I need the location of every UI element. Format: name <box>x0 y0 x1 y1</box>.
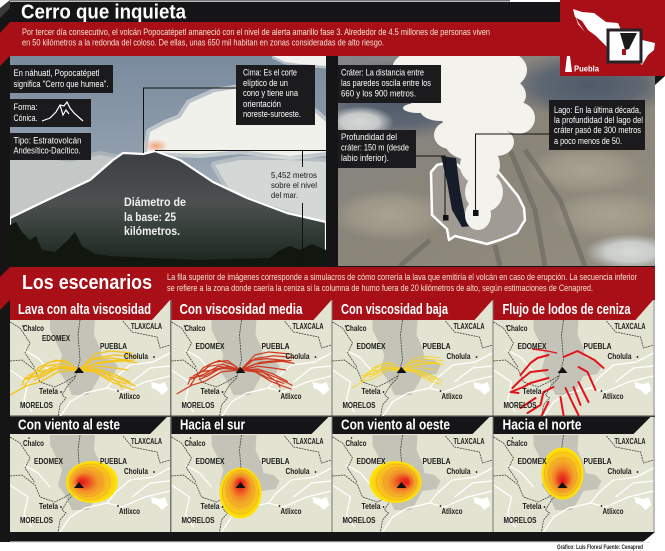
callout: lake: la profundidad del lago del <box>554 115 643 125</box>
label: height: 5,452 metros <box>271 170 317 180</box>
text box: forma with cone icon: Forma: <box>14 102 38 112</box>
map: Chalco <box>346 324 367 333</box>
map: Atlixco <box>119 392 140 401</box>
photo: terrain <box>338 56 655 266</box>
map <box>332 435 492 532</box>
band: Los escenarios <box>10 267 655 300</box>
map: Tetela <box>522 387 542 396</box>
panel backgrounds <box>10 300 655 532</box>
map: PUEBLA <box>584 457 612 466</box>
header: Hacia el sur <box>180 416 245 434</box>
photo: smoke plume <box>393 44 535 230</box>
map: MORELOS <box>182 516 215 525</box>
text box: tipo: Tipo: Estratovolcán <box>14 136 82 146</box>
map: Atlixco <box>280 507 302 516</box>
map: Atlixco <box>280 392 302 401</box>
leader: height <box>155 150 326 266</box>
map: MORELOS <box>342 516 376 525</box>
header <box>494 416 650 434</box>
intro band <box>10 22 560 56</box>
map: Atlixco <box>442 507 463 516</box>
callout: cima: elíptico de un <box>243 78 288 88</box>
photo: volcano cone with white outline <box>10 151 326 266</box>
map: Atlixco <box>119 507 140 516</box>
label: height <box>271 170 317 200</box>
panel: locator map <box>560 0 665 85</box>
map: PUEBLA <box>262 342 290 351</box>
panel: crater photo <box>338 56 655 266</box>
map: Cholula <box>608 467 632 476</box>
map <box>172 320 332 417</box>
callout: crater: 660 y los 900 metros. <box>341 88 416 98</box>
left fold accent: top <box>0 22 10 66</box>
label: base diameter: la base: 25 <box>124 212 177 224</box>
map: TLAXCALA <box>454 322 485 331</box>
panel: hacia el norte <box>494 416 654 532</box>
title: Cerro que inquieta <box>21 2 187 24</box>
map: TLAXCALA <box>292 322 324 331</box>
label: base diameter <box>124 197 186 238</box>
map: Atlixco <box>442 392 463 401</box>
heading: Los escenarios: Los escenarios <box>22 272 152 294</box>
header: Con viento al este <box>18 416 120 434</box>
map: Chalco <box>506 324 528 333</box>
map: Tetela <box>362 387 381 396</box>
icon: Mexico silhouette <box>573 9 655 65</box>
map: Cholula <box>124 352 148 361</box>
callout: crater: Cráter: La distancia entre <box>341 68 424 78</box>
map: EDOMEX <box>42 334 71 343</box>
panel: lava alta viscosidad <box>10 300 170 417</box>
map: Cholula <box>286 352 310 361</box>
map: Tetela <box>522 502 542 511</box>
map: Tetela <box>39 387 58 396</box>
panel: flujo de lodos <box>494 300 654 417</box>
map: TLAXCALA <box>292 437 324 446</box>
intro band: en 50 kilómetros a la redonda del coloso. De ellas, unas 650 mil habitan en zonas consideradas de alto riesgo. <box>22 38 384 48</box>
map: MORELOS <box>20 516 54 525</box>
photo: sky and clouds <box>10 56 326 221</box>
map: MORELOS <box>504 516 537 525</box>
icon: volcano marker <box>565 56 572 72</box>
ash plume <box>220 468 262 518</box>
text box: forma with cone icon: Cónica. <box>14 113 38 123</box>
callout: crater: las paredes oscila entre los <box>341 78 431 88</box>
text box: nahuatl <box>10 65 113 93</box>
map <box>332 320 492 417</box>
photo: crater floor and rim <box>431 162 525 244</box>
map: Chalco <box>23 439 44 448</box>
panel: viento al este <box>10 416 170 532</box>
callout: crater depth: Profundidad del <box>341 132 397 142</box>
label: Puebla: Puebla <box>574 64 599 74</box>
map: EDOMEX <box>518 457 547 466</box>
map: Atlixco <box>602 507 624 516</box>
header <box>172 416 328 434</box>
map: EDOMEX <box>196 457 225 466</box>
map: Chalco <box>184 439 206 448</box>
label: height: del mar. <box>271 190 298 200</box>
panel: viento al oeste <box>332 416 492 532</box>
map: EDOMEX <box>356 342 386 351</box>
map: PUEBLA <box>422 457 451 466</box>
map: TLAXCALA <box>454 437 485 446</box>
callout: lake: Lago: En la última década, <box>554 105 641 115</box>
map: Chalco <box>23 324 44 333</box>
icon: Puebla inset frame <box>608 30 641 62</box>
cut corner of bottom bar <box>643 532 655 542</box>
text box: nahuatl: significa "Cerro que humea". <box>14 79 108 89</box>
left fold accent: escenarios <box>0 267 10 310</box>
map: Cholula <box>286 467 310 476</box>
map: PUEBLA <box>100 457 127 466</box>
map: EDOMEX <box>34 457 64 466</box>
panel: viscosidad media <box>172 300 332 417</box>
map: TLAXCALA <box>131 322 162 331</box>
mudflows <box>510 349 604 416</box>
callout: cima: Cima: Es el corte <box>243 68 297 78</box>
header: Hacia el norte <box>502 416 582 434</box>
map: Chalco <box>506 439 528 448</box>
callout: cima: noreste-suroeste. <box>243 109 301 119</box>
map: Cholula <box>446 467 471 476</box>
photo: crater shadow <box>441 156 472 227</box>
callout: crater depth: labio inferior). <box>341 153 389 163</box>
map: Tetela <box>39 502 58 511</box>
map: MORELOS <box>182 401 215 410</box>
text box: nahuatl: En náhuatl, Popocatépetl <box>14 68 100 78</box>
map: MORELOS <box>20 401 54 410</box>
text box: tipo: Andesítico-Dacítico. <box>14 146 80 156</box>
ash plume <box>542 448 584 500</box>
map: PUEBLA <box>262 457 290 466</box>
map: EDOMEX <box>518 342 547 351</box>
text box: forma with cone icon <box>10 99 91 127</box>
callout: crater depth: cráter: 150 m (desde <box>341 142 409 152</box>
photo: trees <box>10 222 326 266</box>
map: Tetela <box>200 387 220 396</box>
map: TLAXCALA <box>614 322 646 331</box>
map: Tetela <box>200 502 220 511</box>
map: TLAXCALA <box>131 437 162 446</box>
map: Tetela <box>362 502 381 511</box>
scenarios description <box>167 272 637 293</box>
label: base diameter: kilómetros. <box>124 226 180 238</box>
panel: viscosidad baja <box>332 300 492 417</box>
map: PUEBLA <box>584 342 612 351</box>
map: Cholula <box>124 467 148 476</box>
leader: lake <box>473 134 549 216</box>
map: MORELOS <box>504 401 537 410</box>
label: base diameter: Diámetro de <box>124 197 186 209</box>
text box: tipo <box>10 133 91 160</box>
header: Con viscosidad baja <box>341 301 448 318</box>
icon: volcano outline <box>42 102 83 121</box>
map <box>494 320 654 417</box>
callout: cima <box>236 65 315 125</box>
callout: crater depth <box>338 130 416 168</box>
leader: cima <box>144 88 236 153</box>
header: Lava con alta viscosidad <box>18 301 151 318</box>
ash plume <box>370 461 422 503</box>
map: EDOMEX <box>196 342 225 351</box>
map: Atlixco <box>602 392 624 401</box>
callout: cima: cono y tiene una <box>243 88 298 98</box>
panel: volcano photo <box>10 56 326 266</box>
map: MORELOS <box>342 401 376 410</box>
map: PUEBLA <box>100 342 127 351</box>
map <box>10 435 170 532</box>
header: Con viento al oeste <box>341 416 450 434</box>
label: height: sobre el nivel <box>271 180 317 190</box>
ash plume <box>66 461 118 503</box>
map <box>10 320 170 417</box>
intro band: Por tercer día consecutivo, el volcán Popocatépetl amaneció con el nivel de alerta amarillo fase 3. Alrededor de 4.5 millones de personas viven <box>22 27 490 37</box>
callout: cima: orientación <box>243 99 281 109</box>
map <box>494 435 654 532</box>
map: Cholula <box>446 352 471 361</box>
header: Con viscosidad media <box>180 301 303 318</box>
map: Chalco <box>184 324 206 333</box>
map: PUEBLA <box>422 342 451 351</box>
map <box>172 435 332 532</box>
map: TLAXCALA <box>614 437 646 446</box>
map: Chalco <box>346 439 367 448</box>
map: Cholula <box>608 352 632 361</box>
map: EDOMEX <box>356 457 386 466</box>
callout: lake: cráter pasó de 300 metros <box>554 125 641 135</box>
leader: crater depth <box>416 156 448 220</box>
callout: crater <box>338 65 441 103</box>
callout: lake <box>549 100 645 150</box>
callout: lake: a poco menos de 50. <box>554 136 622 146</box>
panel: hacia el sur <box>172 416 332 532</box>
